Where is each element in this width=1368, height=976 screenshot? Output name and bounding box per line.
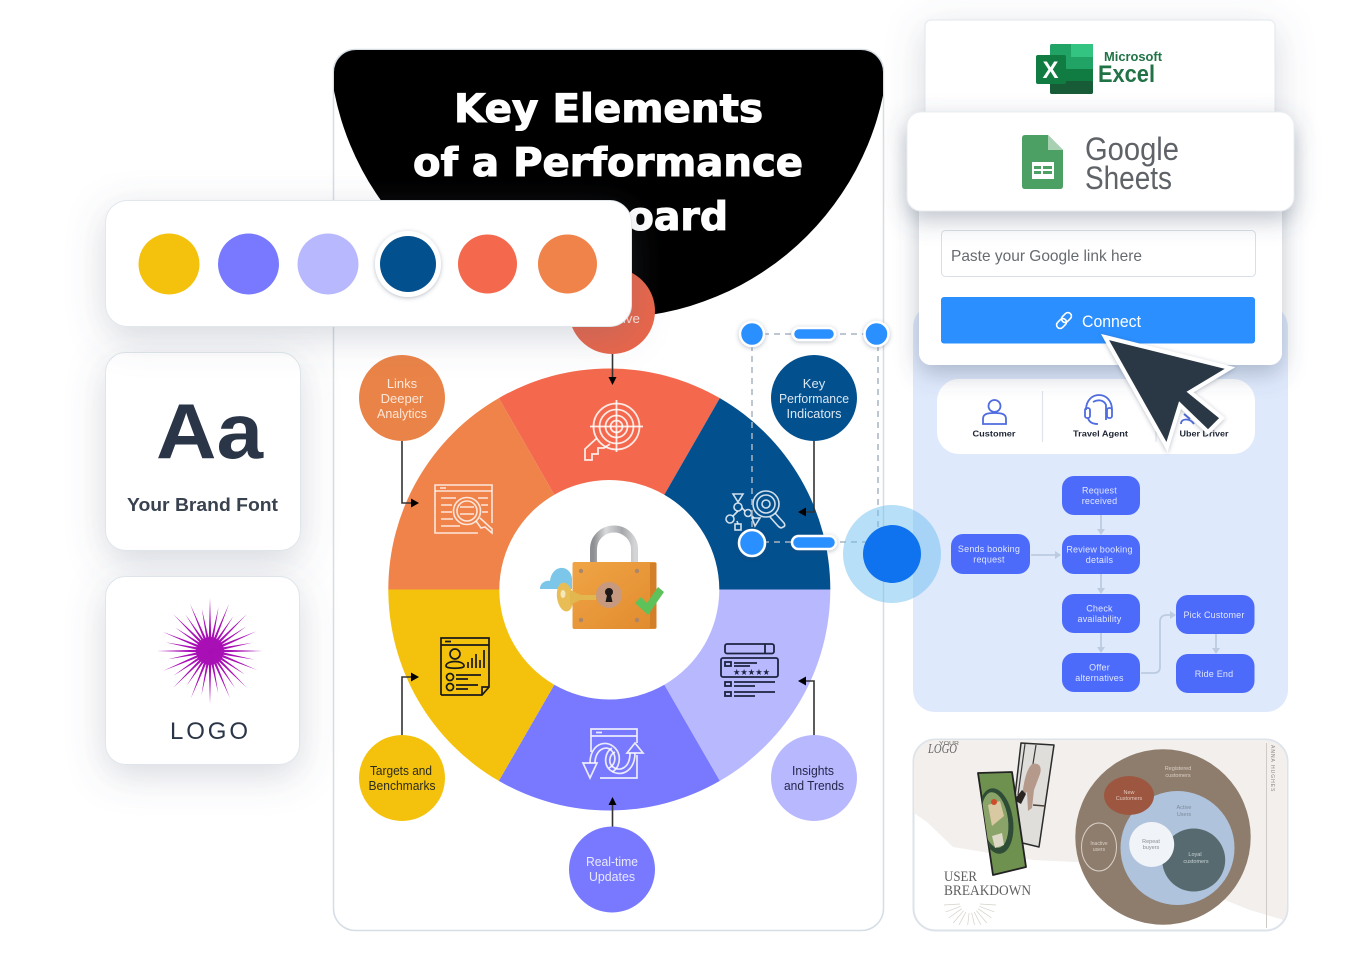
flow step: sends booking request: Sends booking	[958, 544, 1020, 554]
panel: roles tabs	[937, 379, 1255, 454]
slide title: USER	[944, 869, 977, 885]
card: logo	[106, 576, 300, 764]
slide logo: YOUR	[939, 741, 960, 747]
flow step: check availability	[1062, 594, 1140, 633]
black title backdrop	[334, 50, 883, 314]
active users: Active	[1177, 805, 1191, 811]
torn paper background	[914, 740, 1287, 921]
callout: real-time updates	[569, 826, 655, 912]
registered customers: customers	[1165, 773, 1191, 779]
slide title: BREAKDOWN	[944, 883, 1031, 899]
icon: travel agent headset	[1085, 395, 1112, 424]
callout: links deeper analytics: Deeper	[381, 391, 424, 406]
loyal customers: Loyal	[1188, 852, 1202, 858]
callout: targets and benchmarks: Benchmarks	[368, 778, 436, 793]
sheets wordmark: Google	[1085, 131, 1179, 167]
phone: salad photo	[975, 772, 1026, 875]
icon: analytics window	[435, 485, 492, 533]
side label: ANNA HUGHES	[1269, 745, 1275, 792]
panel: blue flowchart background	[913, 305, 1288, 712]
panel: roles tabs: Travel Agent	[1073, 428, 1128, 438]
slide logo: LOGO	[927, 742, 957, 757]
flow step: review booking details: Review booking	[1066, 544, 1133, 554]
registered customers	[1075, 749, 1251, 925]
phone: yoga photo	[1010, 743, 1054, 847]
card: brand font: Your Brand Font	[127, 495, 278, 515]
excel wordmark	[1098, 50, 1163, 88]
flow step: check availability: Check	[1086, 604, 1113, 614]
inactive users: Inactive	[1090, 841, 1108, 847]
key	[555, 582, 575, 612]
flow step: request received: Request	[1082, 486, 1117, 496]
icon: cursor arrow	[1105, 337, 1230, 447]
panel: roles tabs: Uber Driver	[1180, 428, 1229, 438]
vertical rule	[1266, 743, 1267, 928]
callout: key performance indicators	[771, 355, 857, 441]
slide sunburst	[944, 904, 996, 925]
flow step: offer alternatives: alternatives	[1075, 673, 1124, 683]
registered customers: Registered	[1165, 766, 1191, 772]
active users: Users	[1177, 812, 1191, 818]
callout: targets and benchmarks	[359, 735, 445, 821]
flow step: review booking details	[1062, 535, 1140, 574]
sheets wordmark	[1085, 131, 1179, 196]
connector arrows	[402, 350, 814, 827]
excel wordmark: Microsoft	[1104, 50, 1163, 64]
card: connect form	[919, 130, 1282, 365]
flow step: ride end	[1176, 654, 1254, 693]
panel: performance dashboard infographic	[329, 0, 889, 930]
callout: insights and trends: and Trends	[784, 778, 844, 793]
flow step: offer alternatives: Offer	[1089, 662, 1110, 672]
panel: roles tabs: Customer	[972, 428, 1016, 438]
icon: KPI nodes and magnifier	[726, 491, 785, 530]
title: Dashboard	[488, 195, 728, 240]
repeat buyers	[1129, 822, 1174, 867]
check mark	[635, 587, 664, 615]
loyal customers: customers	[1183, 859, 1209, 865]
sheets wordmark: Sheets	[1085, 160, 1172, 196]
slide title	[944, 869, 1031, 899]
flow step: sends booking request: request	[973, 554, 1005, 564]
card: colour palette	[106, 200, 632, 326]
card: user breakdown slide	[914, 740, 1288, 930]
callout: key performance indicators: Indicators	[786, 406, 842, 421]
icon: google sheets	[1022, 135, 1063, 189]
flow step: pick customer: Pick Customer	[1183, 610, 1245, 620]
flow step: pick customer	[1176, 595, 1254, 634]
segment: links deeper analytics	[388, 398, 554, 590]
callout: objective: Objective	[584, 311, 640, 326]
icon: purple starburst	[157, 598, 263, 704]
card: brand font: Aa	[156, 387, 264, 475]
icon: rating list: ★★★★★	[733, 667, 770, 677]
card: logo: LOGO	[170, 718, 248, 745]
donut chart	[388, 368, 830, 811]
callout: objective	[569, 268, 655, 354]
callout: links deeper analytics	[359, 355, 445, 441]
title: Key Elements	[454, 87, 763, 132]
callout: real-time updates: Real-time	[586, 854, 638, 869]
callout: insights and trends: Insights	[792, 763, 834, 778]
icon: rating list	[721, 644, 778, 696]
callout: targets and benchmarks: Targets and	[370, 763, 432, 778]
flow step: request received	[1062, 476, 1140, 515]
title: of a Performance	[413, 141, 803, 186]
title	[413, 87, 803, 240]
excel wordmark: Excel	[1098, 61, 1155, 88]
input: google link: Paste your Google link here	[951, 248, 1142, 265]
repeat buyers: buyers	[1143, 845, 1160, 851]
icon: excel	[1036, 44, 1093, 94]
card: brand font	[106, 352, 300, 550]
segment: key performance indicators	[664, 398, 830, 590]
callout: insights and trends	[771, 735, 857, 821]
key hole	[596, 582, 622, 608]
callout: key performance indicators: Performance	[779, 391, 849, 406]
inactive users: users	[1093, 847, 1106, 853]
icon: target with key	[585, 400, 643, 460]
callout: links deeper analytics: Analytics	[377, 406, 427, 421]
active users	[1120, 791, 1234, 905]
button: connect: Connect	[1082, 312, 1141, 331]
icon: padlock with key	[540, 529, 664, 629]
cloud	[540, 568, 572, 589]
lock body	[572, 562, 656, 629]
flow step: ride end: Ride End	[1195, 669, 1233, 679]
callout: objective: Clear	[596, 292, 628, 307]
icon: report document	[441, 638, 489, 695]
card: google sheets	[907, 112, 1294, 211]
new customers: Customers	[1116, 796, 1143, 802]
venn diagram	[1075, 749, 1251, 925]
segment: real-time updates	[499, 685, 720, 811]
halo node	[843, 505, 941, 603]
handles	[739, 322, 888, 556]
icon: sync window	[583, 729, 643, 778]
callout: links deeper analytics: Links	[387, 376, 418, 391]
new customers: New	[1123, 790, 1135, 796]
callout: key performance indicators: Key	[803, 376, 826, 391]
loyal customers	[1162, 828, 1225, 892]
shackle	[594, 529, 634, 564]
icon: customer	[983, 400, 1006, 424]
swatches	[138, 231, 597, 297]
flowchart connectors	[1031, 515, 1220, 673]
flow step: request received: received	[1082, 496, 1117, 506]
icon: uber driver	[1181, 414, 1194, 424]
input: google link	[942, 230, 1256, 276]
icon: excel: X	[1042, 57, 1059, 84]
button: connect	[941, 297, 1255, 344]
flow step: sends booking request	[951, 534, 1030, 574]
new customers	[1104, 776, 1154, 815]
inactive users	[1082, 823, 1116, 871]
flow step: offer alternatives	[1062, 653, 1140, 692]
card: excel	[925, 20, 1275, 130]
callout: real-time updates: Updates	[589, 869, 635, 884]
flow step: review booking details: details	[1086, 555, 1114, 565]
segment: objective	[499, 368, 720, 495]
segment: targets and benchmarks	[388, 590, 554, 781]
segment: insights and trends	[664, 590, 830, 781]
selection frame with handles	[739, 322, 941, 603]
flow step: check availability: availability	[1078, 614, 1122, 624]
repeat buyers: Repeat	[1142, 839, 1160, 845]
